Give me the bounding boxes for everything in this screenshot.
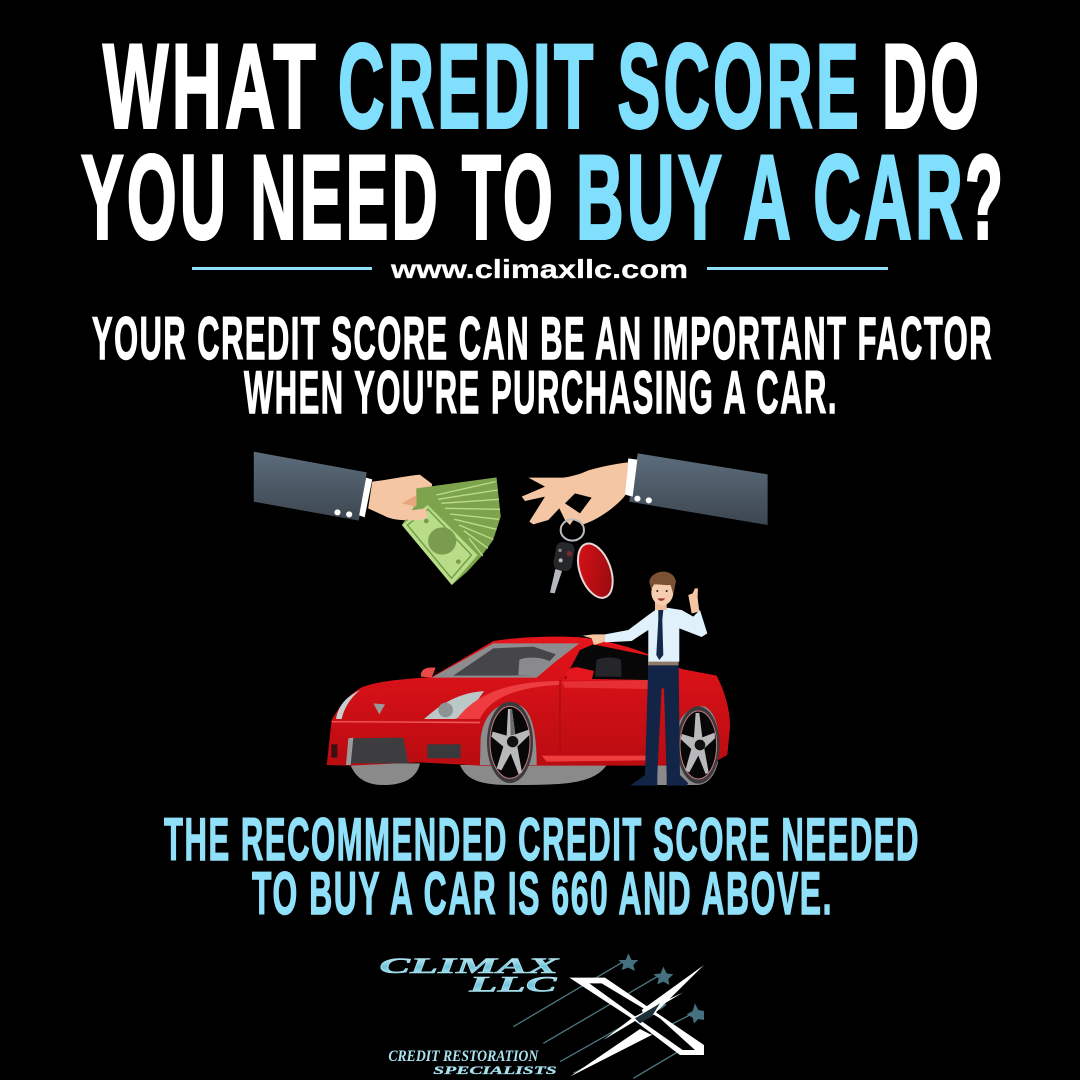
title [81, 20, 1003, 264]
logo text: SPECIALISTS [433, 1063, 557, 1077]
recommendation text [164, 806, 920, 927]
illustration: sleeve of hand with keys [629, 453, 768, 525]
logo text: CREDIT RESTORATION [388, 1048, 539, 1065]
illustration: salesman with thumb up [583, 572, 707, 786]
title: YOU NEED TO [81, 130, 556, 264]
illustration: hand giving money [254, 452, 501, 585]
logo: Climax LLC [379, 953, 704, 1078]
front wheel [487, 702, 533, 783]
intro text [92, 305, 993, 426]
illustration: hand holding car keys [522, 458, 637, 603]
title: DO [882, 20, 982, 154]
rear wheel [677, 706, 720, 784]
logo text: CLIMAX [379, 953, 560, 978]
title: WHAT [103, 20, 319, 154]
logo mark: X [569, 965, 704, 1077]
title: ? [965, 130, 1003, 264]
logo text [379, 953, 560, 1077]
illustration: red car [327, 637, 730, 785]
logo text: LLC [467, 971, 558, 996]
website line: www.climaxllc.com [390, 254, 688, 284]
website line [192, 254, 888, 284]
